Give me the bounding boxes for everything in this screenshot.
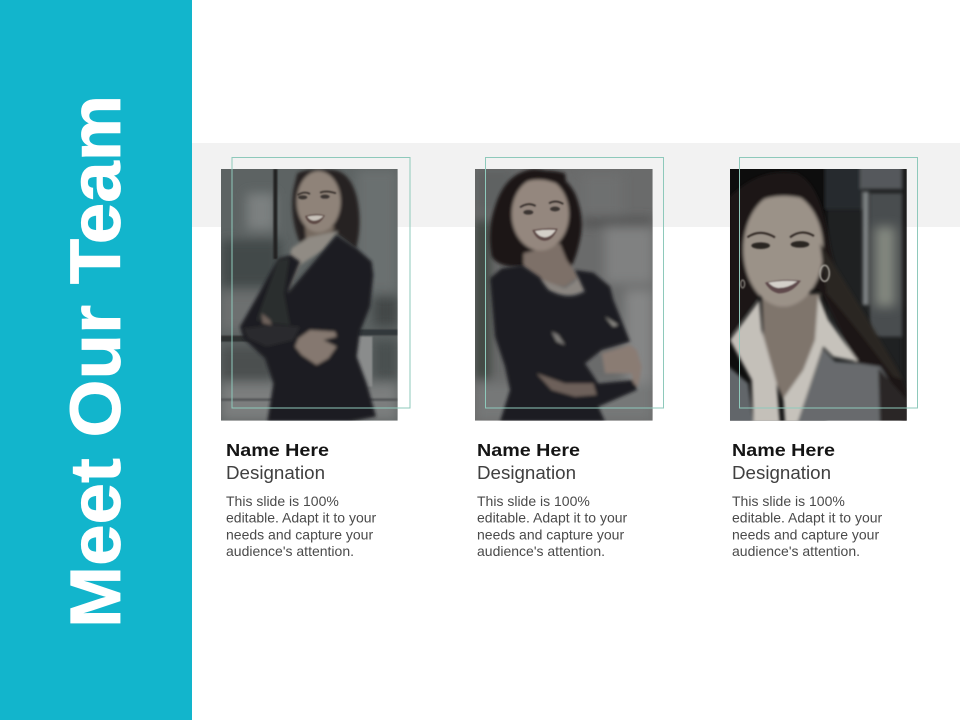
designation: Designation — [477, 462, 576, 483]
description: editable. Adapt it to your — [477, 510, 628, 526]
panel: team member 1 — [221, 158, 410, 559]
name: Name Here — [732, 440, 835, 460]
name: Name Here — [226, 440, 329, 460]
panel: team member 3 — [727, 158, 918, 559]
designation: Designation — [226, 462, 325, 483]
panel: teal title sidebar — [0, 0, 192, 720]
photo frame outline — [232, 158, 410, 408]
description: editable. Adapt it to your — [226, 510, 377, 526]
title: Meet Our Team — [57, 95, 136, 628]
photo frame outline — [740, 158, 918, 408]
description: needs and capture your — [732, 526, 879, 542]
description — [477, 493, 628, 559]
panel: team member 2 — [475, 158, 664, 559]
description: audience's attention. — [477, 543, 605, 559]
photo: woman with long hair and grey blazer — [727, 166, 910, 424]
photo: woman in dark blazer — [221, 169, 398, 422]
description: audience's attention. — [226, 543, 354, 559]
photo: woman with crossed arms — [475, 169, 653, 422]
description: needs and capture your — [477, 526, 624, 542]
designation: Designation — [732, 462, 831, 483]
name: Name Here — [477, 440, 580, 460]
description: This slide is 100% — [226, 493, 339, 509]
description — [226, 493, 377, 559]
description: editable. Adapt it to your — [732, 510, 883, 526]
description: This slide is 100% — [732, 493, 845, 509]
description: needs and capture your — [226, 526, 373, 542]
grey background band — [192, 143, 960, 227]
description: This slide is 100% — [477, 493, 590, 509]
description — [732, 493, 883, 559]
photo frame outline — [486, 158, 664, 408]
description: audience's attention. — [732, 543, 860, 559]
